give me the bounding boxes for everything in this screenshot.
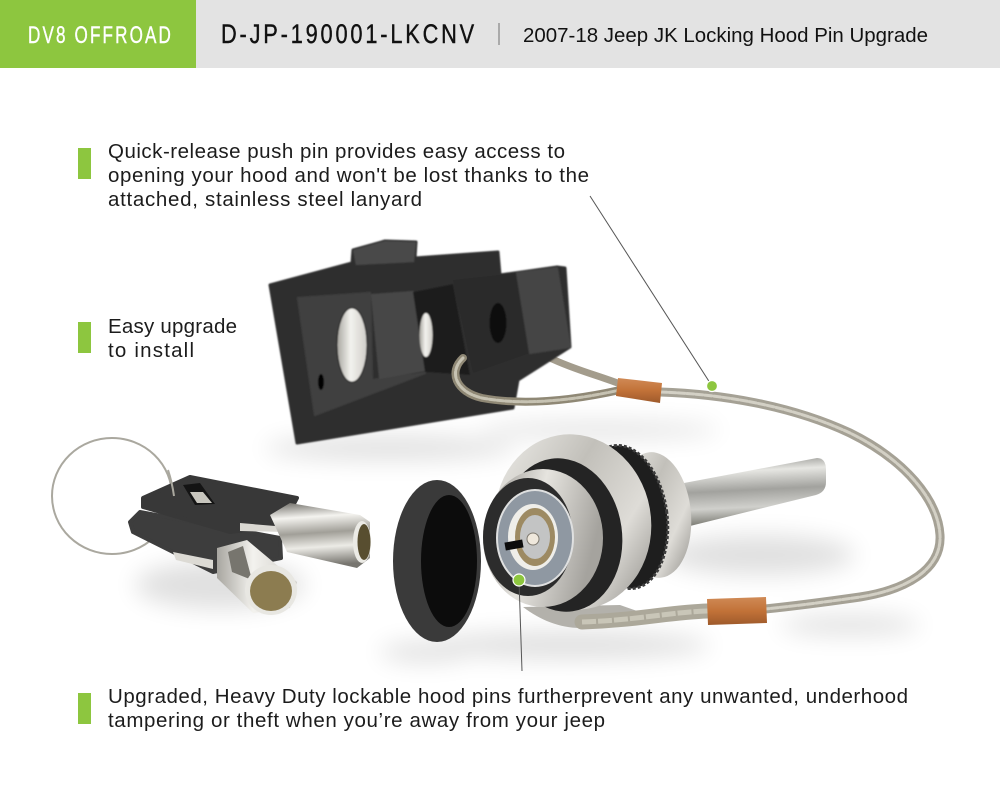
pin shaft: [684, 458, 826, 526]
callout text: Quick-release push pin provides easy access to: [108, 140, 565, 163]
product title: 2007-18 Jeep JK Locking Hood Pin Upgrade: [523, 25, 928, 47]
knurled grip: [571, 440, 677, 594]
callout text: tampering or theft when you’re away from your jeep: [108, 709, 605, 732]
push pin assembly: [481, 422, 826, 628]
lock marker dot: [513, 574, 525, 586]
lower key: [130, 512, 297, 615]
marker bar: [78, 322, 91, 353]
bracket: hood catch: [270, 241, 570, 443]
soft shadows: [135, 422, 920, 662]
rubber ring: [492, 450, 632, 620]
callout text: to install: [108, 339, 194, 362]
rear collar: [614, 449, 696, 581]
cable marker dot: [706, 380, 718, 392]
cap: [393, 480, 481, 642]
marker bar: [78, 148, 91, 179]
callout text: [108, 315, 237, 362]
washer with tail: [523, 605, 640, 628]
lock cylinder: [497, 490, 573, 586]
cable: lanyard: [550, 358, 940, 609]
key ring: [52, 438, 172, 554]
callout text: Easy upgrade: [108, 315, 237, 338]
callout text: [108, 140, 589, 211]
ferrule: upper copper: [616, 378, 662, 403]
cable over washer: [582, 611, 708, 622]
ferrule: lower copper: [707, 597, 767, 625]
callout text: attached, stainless steel lanyard: [108, 188, 422, 211]
callout: easy install: [78, 315, 237, 362]
callout text: opening your hood and won't be lost thanks to the: [108, 164, 589, 187]
header bar: [0, 0, 1000, 68]
callout text: [108, 685, 908, 732]
cable loop front: [455, 358, 620, 402]
part number: D-JP-190001-LKCNV: [221, 19, 477, 49]
keys: [52, 438, 371, 615]
upper key: [143, 470, 371, 568]
callout text: Upgraded, Heavy Duty lockable hood pins furtherprevent any unwanted, underhood: [108, 685, 908, 708]
leader line: [590, 196, 712, 386]
callout: lockable pins: [78, 574, 908, 732]
callout: push pin: [78, 140, 718, 392]
leader line: [519, 580, 522, 671]
product photo: [52, 241, 940, 662]
dark face: [483, 478, 573, 596]
brand tab: DV8 OFFROAD: [28, 22, 173, 49]
brand tab: [0, 0, 196, 68]
marker bar: [78, 693, 91, 724]
front disk: [483, 469, 603, 607]
